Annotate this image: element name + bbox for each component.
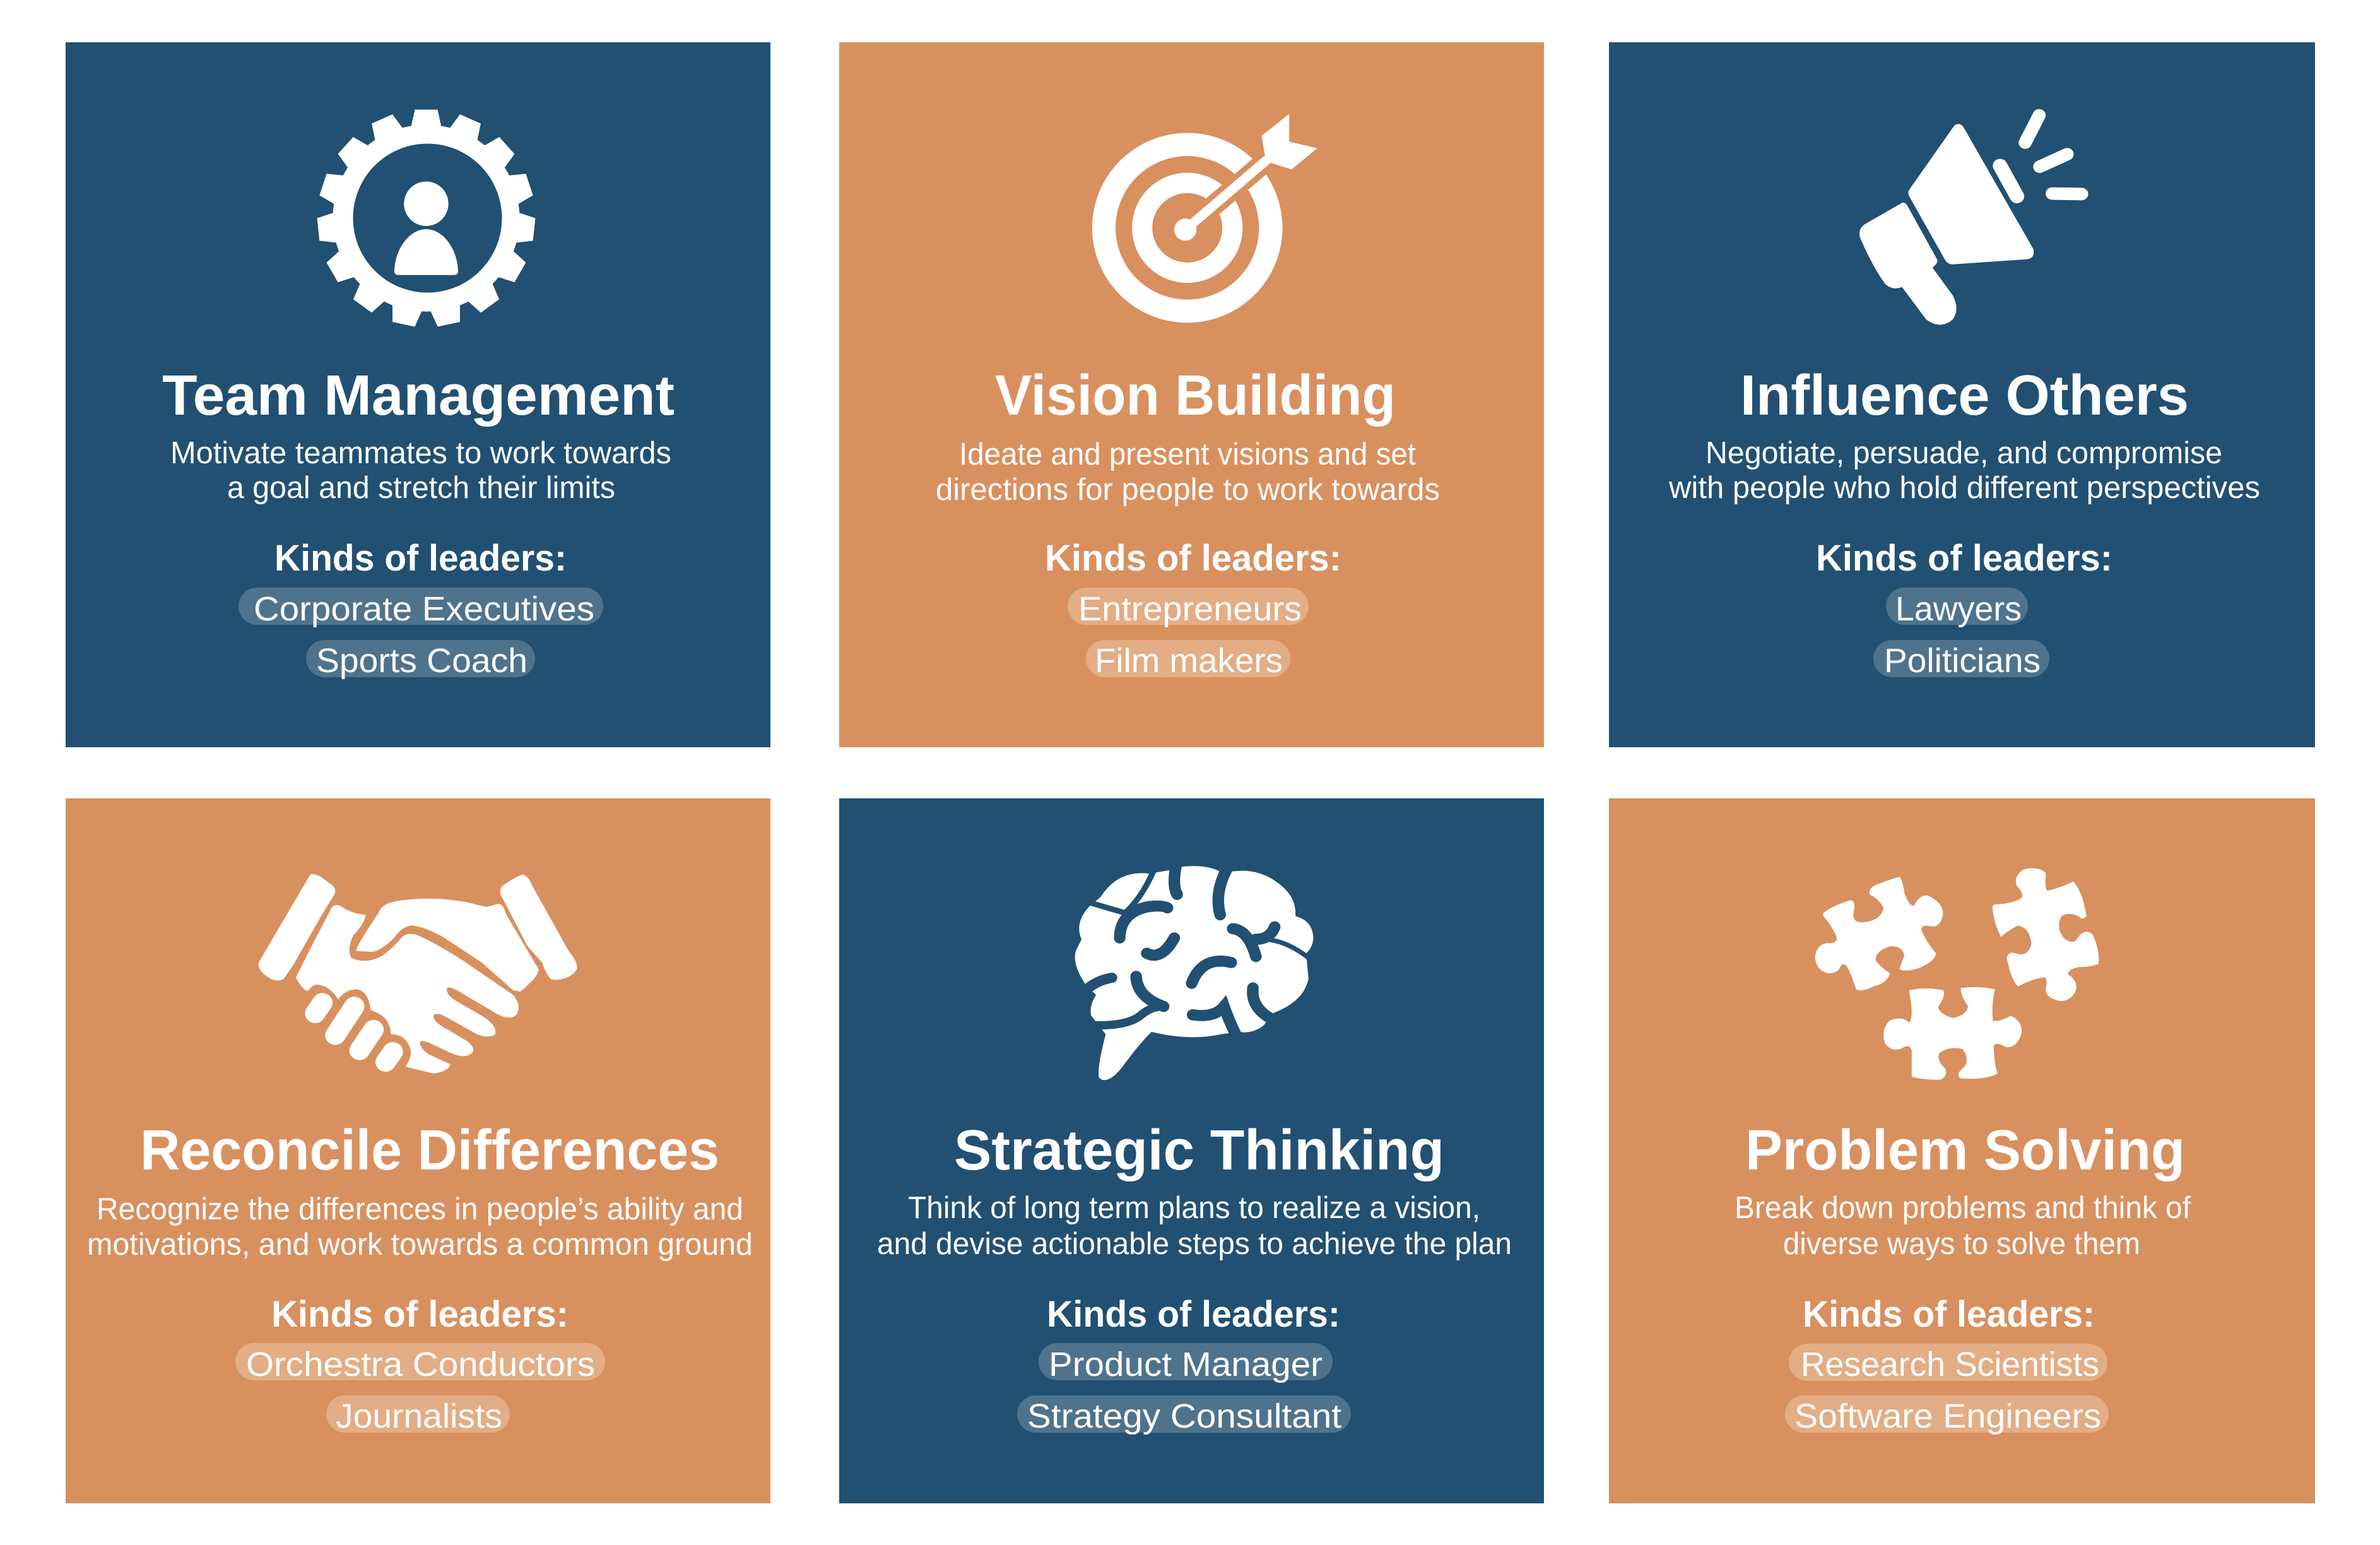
description: motivations, and work towards a common ground: [87, 1228, 753, 1262]
icon: gear with person: [317, 110, 536, 328]
kinds of leaders heading: Kinds of leaders:: [1803, 1294, 2095, 1335]
tag: product manager: Product Manager: [1049, 1346, 1323, 1383]
tag: journalists: Journalists: [336, 1397, 502, 1435]
tag: orchestra conductors: Orchestra Conductors: [246, 1346, 595, 1383]
icon: brain: [1075, 866, 1313, 1080]
tag: film makers: Film makers: [1095, 642, 1283, 680]
description: [87, 1192, 753, 1262]
icon: target with arrow: [1092, 114, 1317, 323]
panel: vision building: [839, 42, 1544, 747]
panel: influence others: [1609, 42, 2315, 747]
description: [1668, 436, 2260, 505]
kinds of leaders heading: Kinds of leaders:: [271, 1294, 568, 1335]
tag: corporate executives: Corporate Executives: [254, 590, 594, 628]
description: a goal and stretch their limits: [227, 471, 615, 505]
icon: handshake: [259, 874, 577, 1074]
title: Problem Solving: [1745, 1119, 2185, 1182]
description: Recognize the differences in people’s ability and: [97, 1192, 743, 1226]
description: Think of long term plans to realize a vision,: [908, 1191, 1480, 1225]
description: directions for people to work towards: [936, 473, 1440, 507]
icon: megaphone: [1859, 115, 2082, 325]
description: with people who hold different perspectives: [1668, 471, 2260, 505]
kinds of leaders heading: Kinds of leaders:: [1045, 538, 1341, 579]
tag: research scientists: Research Scientists: [1801, 1346, 2099, 1383]
kinds of leaders heading: Kinds of leaders:: [1816, 538, 2112, 579]
kinds of leaders heading: Kinds of leaders:: [1047, 1294, 1340, 1335]
tag: entrepreneurs: Entrepreneurs: [1078, 590, 1302, 628]
description: [877, 1191, 1512, 1261]
title: Strategic Thinking: [954, 1119, 1444, 1182]
description: Break down problems and think of: [1735, 1191, 2191, 1225]
description: Ideate and present visions and set: [959, 437, 1416, 471]
icon: puzzle pieces: [1815, 868, 2099, 1080]
tag: lawyers: Lawyers: [1895, 590, 2022, 628]
description: [936, 437, 1440, 507]
description: and devise actionable steps to achieve the plan: [877, 1227, 1512, 1261]
title: Influence Others: [1740, 364, 2189, 427]
description: Motivate teammates to work towards: [170, 436, 671, 470]
tag: politicians: Politicians: [1884, 642, 2041, 680]
description: [1735, 1191, 2191, 1261]
description: [170, 436, 671, 505]
tag: strategy consultant: Strategy Consultant: [1027, 1397, 1341, 1435]
kinds of leaders heading: Kinds of leaders:: [274, 538, 567, 579]
panel: reconcile differences: [66, 798, 770, 1503]
description: diverse ways to solve them: [1783, 1227, 2140, 1261]
panel: problem solving: [1609, 798, 2315, 1503]
tag: software engineers: Software Engineers: [1794, 1397, 2101, 1435]
panel: strategic thinking: [839, 798, 1544, 1503]
title: Reconcile Differences: [140, 1119, 719, 1182]
tag: sports coach: Sports Coach: [316, 642, 527, 680]
title: Vision Building: [995, 364, 1396, 427]
title: Team Management: [162, 364, 675, 427]
description: Negotiate, persuade, and compromise: [1705, 436, 2222, 470]
panel: team management: [66, 42, 770, 747]
